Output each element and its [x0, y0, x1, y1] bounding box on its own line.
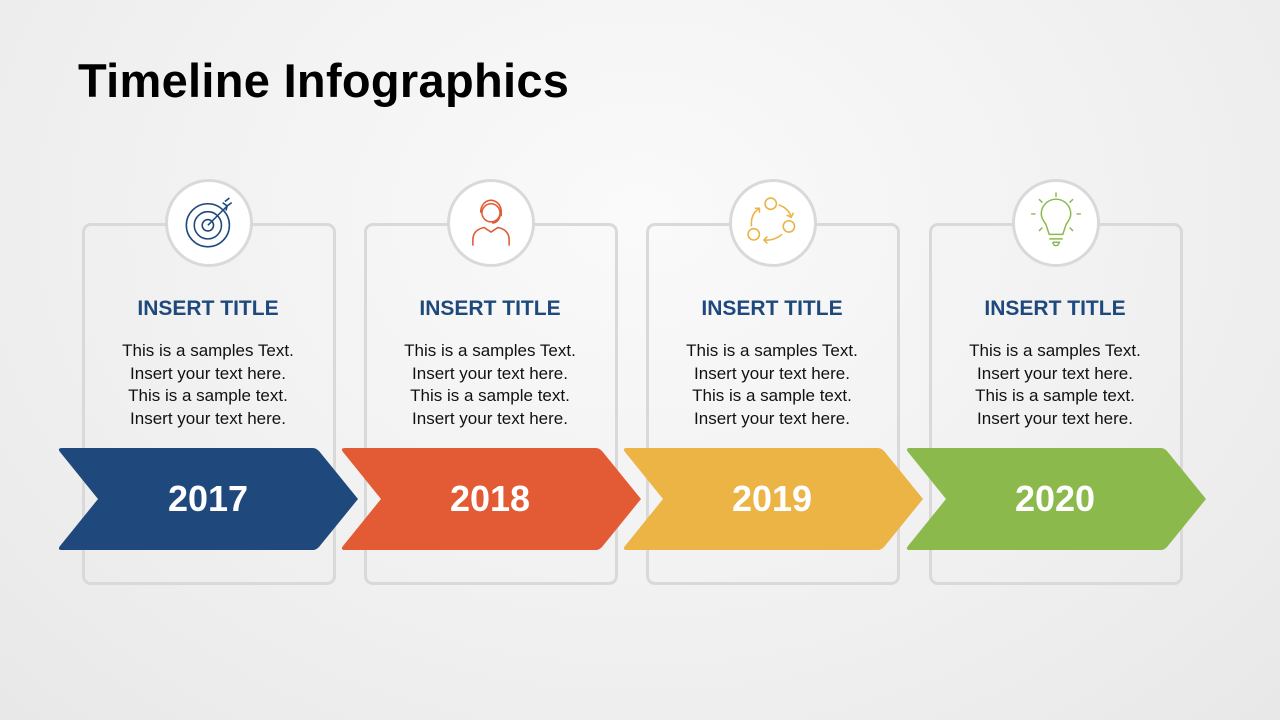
- card frame: [929, 223, 1183, 585]
- text block: Insert your text here.: [977, 364, 1133, 382]
- arrow: 2020: [906, 448, 1206, 550]
- text block: This is a samples Text.: [404, 341, 576, 360]
- text block: This is a samples Text.: [969, 341, 1141, 360]
- heading: INSERT TITLE: [137, 297, 279, 320]
- heading: INSERT TITLE: [419, 297, 561, 320]
- text block: Insert your text here.: [694, 408, 850, 428]
- title: Timeline Infographics: [78, 54, 569, 107]
- year: 2018: [450, 478, 530, 519]
- arrow: 2017: [58, 448, 358, 550]
- year: 2020: [1015, 478, 1095, 519]
- arrow: 2019: [624, 448, 923, 550]
- text block: Insert your text here.: [130, 364, 286, 382]
- card frame: [82, 223, 336, 585]
- text block: Insert your text here.: [412, 364, 568, 382]
- text block: This is a samples Text.: [686, 341, 858, 360]
- text block: [686, 341, 858, 428]
- icon: cycle: [729, 179, 817, 267]
- icon: light bulb: [1012, 179, 1100, 267]
- text block: [969, 341, 1141, 428]
- heading: INSERT TITLE: [701, 297, 843, 320]
- panel: 2020: [906, 179, 1206, 585]
- panel: 2018: [342, 179, 641, 585]
- year: 2017: [168, 478, 248, 519]
- icon: target: [165, 179, 253, 267]
- text block: Insert your text here.: [694, 364, 850, 382]
- text block: [122, 341, 294, 428]
- year: 2019: [732, 478, 812, 519]
- text block: This is a sample text.: [128, 386, 288, 405]
- card frame: [364, 223, 618, 585]
- heading: INSERT TITLE: [984, 297, 1126, 320]
- text block: Insert your text here.: [412, 408, 568, 428]
- text block: This is a samples Text.: [122, 341, 294, 360]
- text block: Insert your text here.: [977, 408, 1133, 428]
- text block: This is a sample text.: [692, 386, 852, 405]
- text block: [404, 341, 576, 428]
- arrow: 2018: [342, 448, 641, 550]
- panel: 2019: [624, 179, 923, 585]
- text block: This is a sample text.: [410, 386, 570, 405]
- icon: headset person: [447, 179, 535, 267]
- card frame: [646, 223, 900, 585]
- panel: 2017: [58, 179, 358, 585]
- text block: Insert your text here.: [130, 408, 286, 428]
- text block: This is a sample text.: [975, 386, 1135, 405]
